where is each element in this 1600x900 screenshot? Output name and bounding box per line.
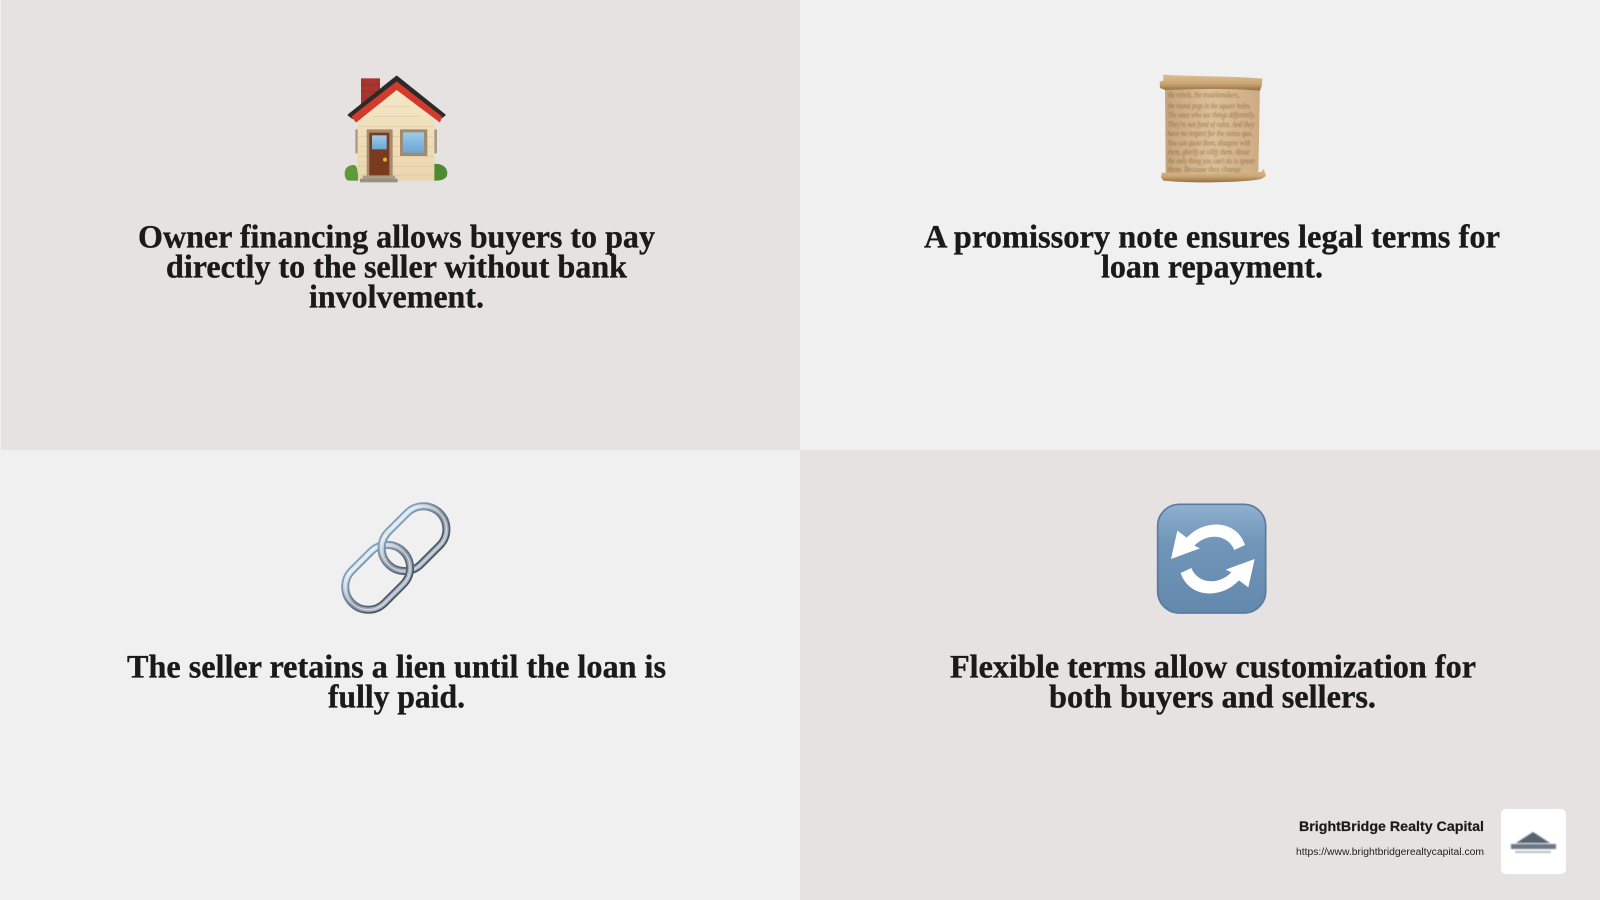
icon: scroll: have no respect for the status quo. — [1168, 129, 1253, 138]
icon: scroll — [1160, 75, 1266, 182]
panel: owner financing — [0, 0, 800, 450]
panel: lien — [127, 502, 666, 715]
icon: scroll: the only thing you can't do is ignore — [1168, 157, 1255, 166]
heading: owner financing: directly to the seller without bank — [166, 250, 628, 286]
icon: scroll: the round pegs in the square holes. — [1168, 102, 1251, 111]
icon: sync arrows — [1158, 504, 1266, 613]
heading: promissory note: A promissory note ensures legal terms for — [924, 220, 1500, 256]
icon: scroll: the rebels, the troublemakers, — [1168, 91, 1239, 100]
icon: chain link — [341, 502, 450, 614]
heading: flexible terms: Flexible terms allow customization for — [950, 650, 1476, 686]
icon: scroll: You can quote them, disagree with — [1168, 138, 1250, 147]
icon: scroll: them, glorify or vilify them. About — [1168, 147, 1250, 156]
company name: BrightBridge Realty Capital — [1299, 818, 1484, 834]
heading: owner financing: involvement. — [309, 280, 484, 316]
logo — [1501, 809, 1566, 874]
heading: owner financing: Owner financing allows buyers to pay — [138, 220, 655, 256]
icon: house — [345, 77, 447, 182]
heading: promissory note: loan repayment. — [1101, 250, 1323, 286]
heading: lien: The seller retains a lien until the loan is — [127, 650, 666, 686]
icon: scroll: them. Because they change — [1168, 165, 1241, 174]
panel: flexible terms — [800, 450, 1600, 900]
heading: flexible terms — [950, 650, 1476, 716]
icon: scroll: They're not fond of rules. And they — [1168, 120, 1255, 129]
heading: lien — [127, 650, 666, 716]
heading: flexible terms: both buyers and sellers. — [1049, 680, 1376, 716]
heading: owner financing — [138, 220, 655, 316]
company url: https://www.brightbridgerealtycapital.com — [1296, 847, 1484, 858]
panel: promissory note — [800, 0, 1600, 450]
heading: lien: fully paid. — [328, 680, 465, 716]
heading: promissory note — [924, 220, 1500, 286]
icon: scroll: The ones who see things differently. — [1168, 110, 1255, 119]
